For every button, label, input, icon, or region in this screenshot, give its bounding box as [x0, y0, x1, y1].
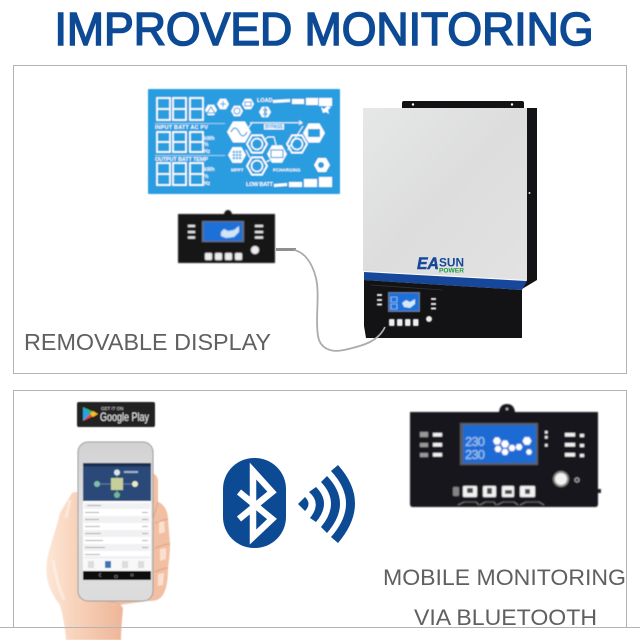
- title: IMPROVED MONITORING: [54, 3, 594, 55]
- LCD screen enlarged: %: [204, 142, 209, 148]
- panel: mobile monitoring: [0, 390, 640, 640]
- removable controller: [178, 210, 275, 263]
- inverter logo: SUN: [439, 256, 464, 270]
- LCD screen enlarged: Hz: [204, 181, 211, 187]
- LCD screen enlarged: %: [204, 174, 209, 180]
- Google Play badge: Google Play: [100, 410, 149, 424]
- LCD screen enlarged: kWh: [204, 167, 215, 173]
- caption: removable display: REMOVABLE DISPLAY: [24, 329, 271, 355]
- LCD screen enlarged: BYPASS: [265, 124, 284, 130]
- LCD screen enlarged: kWh: [204, 136, 215, 142]
- LCD screen enlarged: MPPT: [231, 168, 244, 172]
- panel: removable display: [14, 66, 626, 374]
- Google Play badge: [77, 402, 155, 427]
- LCD screen enlarged: Hz: [204, 149, 211, 155]
- inverter logo: POWER: [439, 268, 464, 274]
- caption: via bluetooth: VIA BLUETOOTH: [414, 605, 597, 630]
- inverter control panel: [377, 292, 436, 326]
- Google Play badge: GET IT ON: [101, 406, 123, 411]
- LCD screen enlarged: [148, 89, 340, 194]
- bluetooth icon: [223, 458, 286, 548]
- inverter: [363, 101, 537, 338]
- controller close-up: 230: [465, 447, 485, 462]
- controller close-up: 230: [465, 434, 485, 449]
- LCD screen enlarged: LOAD: [257, 98, 273, 104]
- hand holding phone: [46, 442, 170, 640]
- LCD screen enlarged: INPUT BATT AC PV: [155, 125, 208, 131]
- controller close-up: [410, 404, 601, 507]
- LCD screen enlarged: OUTPUT BATT TEMP: [155, 157, 208, 163]
- connection cable: [276, 250, 385, 351]
- inverter logo: EA: [417, 254, 439, 273]
- caption: mobile monitoring: MOBILE MONITORING: [383, 565, 626, 590]
- LCD screen enlarged: LOW BATT: [246, 182, 274, 188]
- wireless signal arcs: [298, 465, 355, 543]
- inverter logo: [417, 254, 464, 274]
- LCD screen enlarged: PCHARGING: [273, 168, 301, 172]
